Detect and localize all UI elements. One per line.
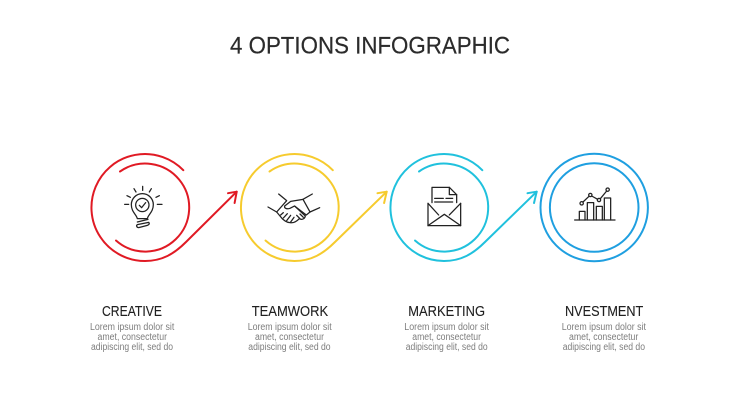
option 4 text: amet, consectetur bbox=[569, 332, 639, 343]
option 1 heading: CREATIVE bbox=[102, 304, 162, 320]
option 2 heading: TEAMWORK bbox=[252, 304, 328, 320]
option 4 text bbox=[562, 322, 646, 353]
icon: envelope with letter bbox=[428, 187, 461, 226]
option 3 text bbox=[404, 322, 489, 353]
icon: bar chart with trend line bbox=[575, 188, 615, 220]
option 4 text: adipiscing elit, sed do bbox=[563, 342, 645, 353]
option 2 text: Lorem ipsum dolor sit bbox=[248, 322, 332, 333]
option 3: marketing spiral with arrow bbox=[390, 154, 537, 261]
option 3 text: amet, consectetur bbox=[412, 332, 482, 343]
option 3 text: adipiscing elit, sed do bbox=[406, 342, 488, 353]
option 4 heading: NVESTMENT bbox=[565, 304, 643, 320]
title: 4 OPTIONS INFOGRAPHIC bbox=[230, 32, 510, 60]
option 4 text: Lorem ipsum dolor sit bbox=[562, 322, 646, 333]
option 1 text bbox=[90, 322, 174, 353]
option 1 text: Lorem ipsum dolor sit bbox=[90, 322, 174, 333]
option 3 heading: MARKETING bbox=[408, 304, 485, 320]
option 4: investment double circle bbox=[540, 154, 648, 261]
option 2 text: adipiscing elit, sed do bbox=[248, 342, 331, 353]
option 2: teamwork spiral with arrow bbox=[241, 154, 387, 261]
option 2 text: amet, consectetur bbox=[255, 332, 325, 343]
option 1 text: amet, consectetur bbox=[98, 332, 168, 343]
option 3 text: Lorem ipsum dolor sit bbox=[404, 322, 489, 333]
icon: light bulb bbox=[125, 186, 162, 228]
icon: handshake bbox=[268, 194, 320, 223]
option 1 text: adipiscing elit, sed do bbox=[91, 342, 173, 353]
option 2 text bbox=[248, 322, 332, 353]
option 1: creative spiral with arrow bbox=[91, 154, 237, 261]
